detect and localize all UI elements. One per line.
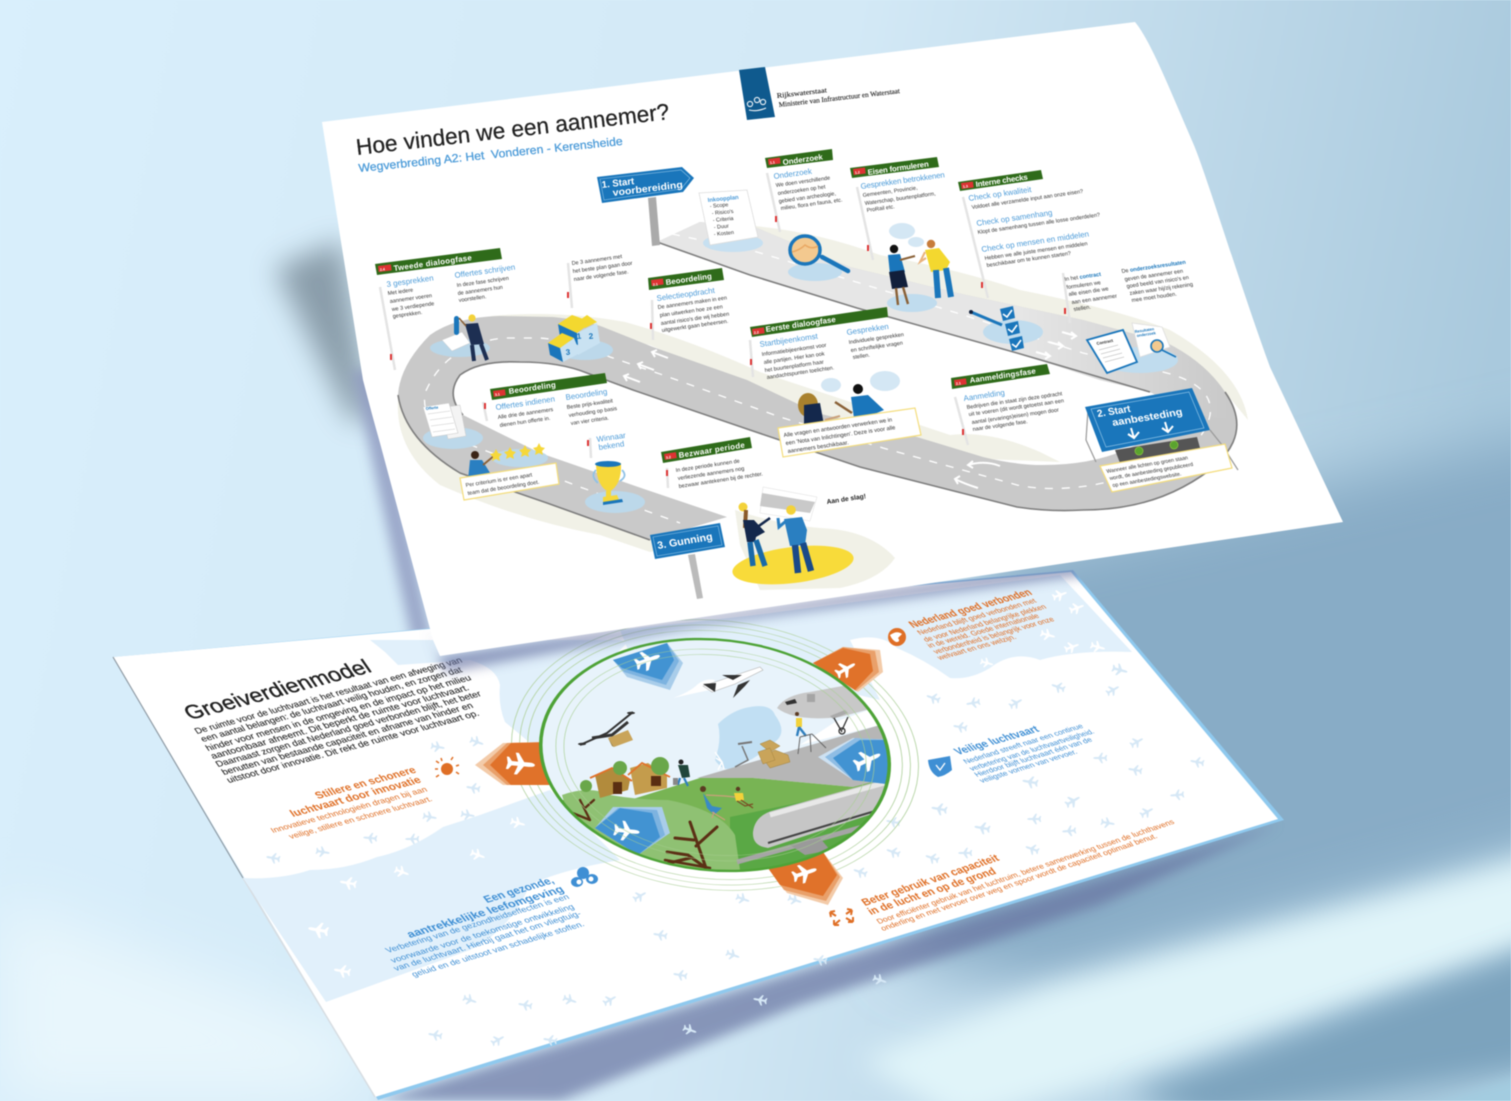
text: Winnaar bekend: [596, 431, 627, 452]
callout: aanbesteding gepubliceerd: [1100, 444, 1232, 492]
text block: Veilige luchtvaart: Hierdoor blijft luchtvaart één van de: [972, 735, 1094, 779]
pattern: white aeroplanes on the land: [307, 587, 1106, 979]
inkoopplan document: Inkoopplan: [707, 195, 740, 204]
panel: Bezwaar periode: Bezwaar periode: [678, 440, 746, 460]
text block: Nederland goed verbonden: Nederland blijft goed verbonden met: [915, 596, 1039, 637]
text block: Nederland goed verbonden: Nederland goed verbonden: [906, 587, 1035, 630]
cloud and plane: [677, 680, 715, 697]
panel: Tweede dialoogfase: [375, 248, 516, 320]
panel: Interne checks: Interne checks: [975, 172, 1029, 189]
text block: introduction: aantoonbaar afneemt. Dit beperkt de ruimte voor luchtvaart.: [208, 683, 471, 761]
panel: Aanmeldingsfase: uit te voeren (dit wordt getoetst aan een: [968, 398, 1064, 418]
panel: Eisen formuleren: Waterschap, buurtenplatform,: [864, 191, 936, 207]
panel: Aanmeldingsfase: Aanmelding: [963, 388, 1005, 403]
text block: Stillere en schonere luchtvaart: [269, 765, 434, 841]
people in conversation: [798, 371, 900, 427]
panel: Beoordeling selectie: 2.1: [653, 282, 658, 287]
scene inside circle: [542, 652, 885, 870]
offerte documents: Offerte: [425, 406, 439, 411]
panel: Onderzoek: We doen verschillende: [775, 175, 831, 189]
heading: Groeiverdienmodel: Groeiverdienmodel: [179, 655, 376, 724]
text block: Een gezonde, aantrekkelijke leefomgeving: aantrekkelijke leefomgeving: [404, 884, 567, 940]
panel: Eisen formuleren: 1.2: [855, 170, 860, 175]
text block: contract and research: goed beeld van risico's en: [1126, 275, 1190, 290]
icon: tree and bicycle: [571, 867, 598, 887]
text block: volgende fase: naar de volgende fase.: [573, 269, 630, 283]
text block: contract and research: formuleren we: [1066, 280, 1102, 291]
panel: Onderzoek: Onderzoek: [782, 152, 824, 167]
worker and ladder: [795, 712, 826, 754]
panel: Onderzoek: onderzoeken op het: [777, 184, 826, 197]
panel: Beoordeling offertes: 3.1: [495, 392, 500, 397]
text block: introduction: De ruimte voor de luchtvaart is het resultaat van een afweging van: [192, 655, 464, 736]
orange pentagon: top right: [813, 647, 883, 692]
inkoopplan document: - Duur: [713, 224, 729, 231]
panel: Beoordeling offertes: verhouding op basis: [568, 406, 618, 419]
sign: 1. Start voorbereiding: 1. Start: [601, 176, 636, 191]
text block: Stillere en schonere luchtvaart: luchtvaart door innovatie: [288, 775, 424, 820]
callout: aanbesteding gepubliceerd: wordt, de aanbesteding gepubliceerd: [1109, 462, 1194, 482]
train: [736, 782, 886, 864]
blue pentagon: lower left: [595, 807, 670, 855]
text block: Nederland goed verbonden: welvaart en ons welzijn.: [934, 633, 1018, 662]
magnifier icon: [788, 236, 848, 281]
panel: Beoordeling offertes: Beste prijs-kwaliteit: [566, 398, 614, 411]
callout: beoordeling per criterium: Per criterium is er een apart: [465, 472, 533, 489]
logo: Rijkswaterstaat: [739, 67, 900, 120]
panel: Aanmeldingsfase: [951, 364, 1064, 433]
team with plan: Aan de slag: [730, 487, 866, 590]
text block: Een gezonde, aantrekkelijke leefomgeving: Verbetering van de gezondheidseffecten is een: [384, 893, 571, 955]
title: Hoe vinden we een aannemer?: [354, 98, 671, 160]
panel: Eerste dialoogfase: aandachtspunten toelichten.: [766, 365, 835, 381]
inkoopplan document: - Kosten: [713, 230, 734, 238]
man with suitcase: [673, 760, 690, 786]
panel: Onderzoek: [765, 149, 843, 212]
panel: Eerste dialoogfase: en schriftelijke vragen: [850, 340, 903, 354]
shadow of the top sheet on the background: [275, 240, 432, 640]
houses: [580, 757, 670, 798]
shadow of the lower sheet: [375, 824, 1280, 1101]
callout: Nota van Inlichtingen: Alle vragen en antwoorden verwerken we in: [783, 417, 893, 439]
text block: Beter gebruik van capaciteit: onderling en met vervoer over weg en spoor wordt de capaciteit optimaal benut.: [879, 832, 1159, 933]
text block: contract and research: De onderzoeksresultaten: [1121, 260, 1187, 275]
panel: Interne checks: Voldoet alle verzamelde input aan onze eisen?: [971, 189, 1084, 211]
panel: Onderzoek: milieu, flora en fauna, etc.: [780, 197, 843, 212]
panel: Beoordeling offertes: Alle drie de aannemers: [497, 407, 554, 421]
map shapes: pale blue land: [243, 575, 1132, 1002]
panel: Aanmeldingsfase: 2.1: [956, 381, 961, 386]
sign: 1. Start voorbereiding: voorbereiding: [612, 180, 683, 199]
panel: Eerste dialoogfase: Gesprekken: [846, 322, 889, 337]
text block: contract and research: mee moet houden.: [1131, 291, 1178, 304]
panel: Beoordeling offertes: dienen hun offerte in.: [499, 416, 551, 429]
text block: Beter gebruik van capaciteit: in de lucht en op de grond: [865, 866, 999, 917]
panel: Eerste dialoogfase: [750, 307, 904, 381]
trophy: [585, 461, 645, 513]
inkoopplan document: - Scope: [709, 202, 729, 210]
callout: Nota van Inlichtingen: aannemers beschikbaar.: [787, 440, 850, 455]
panel: Eerste dialoogfase: het buurtenplatform haar: [764, 359, 824, 374]
panel: Interne checks: Check op mensen en middelen: [981, 230, 1090, 254]
text block: introduction: een aantal belangen: de luchtvaart veilig houden, en zorgen dat: [198, 665, 465, 744]
panel: Aanmeldingsfase: aantal (ervarings)eisen) mogen door: [971, 407, 1060, 426]
panel: Interne checks: Check op samenhang: [976, 208, 1053, 228]
panel: Onderzoek: gebied van archeologie,: [778, 191, 837, 205]
panel: Eisen formuleren: Eisen formuleren: [867, 159, 929, 177]
text block: Nederland goed verbonden: verbondenheid is belangrijk voor onze: [931, 615, 1056, 656]
text block: introduction: Daarnaast zorgen dat Nederland goed verbonden blijft, het beter: [213, 689, 483, 769]
panel: Bezwaar periode: In deze periode kunnen de: [675, 458, 740, 474]
text block: Beter gebruik van capaciteit: Beter gebruik van capaciteit: [859, 853, 1002, 908]
text block: contract and research: zaken waar hij/zij rekening: [1129, 282, 1194, 297]
panel: Beoordeling selectie: Selectieopdracht: [656, 286, 716, 303]
panel: Beoordeling selectie: De aannemers maken in een: [657, 295, 727, 311]
panel: Aanmeldingsfase: Bedrijven die in staat zijn deze opdracht: [966, 391, 1063, 411]
panel: Eerste dialoogfase: Individuele gesprekken: [848, 332, 904, 346]
text block: Nederland goed verbonden: [906, 587, 1056, 662]
text block: Veilige luchtvaart: [952, 722, 1096, 785]
callout: Nota van Inlichtingen: [778, 408, 921, 457]
panel: Tweede dialoogfase: Met iedere: [387, 287, 414, 297]
panel: Interne checks: Check op kwaliteit: [968, 185, 1033, 203]
text block: contract and research: alle eisen die we: [1068, 286, 1109, 298]
text block: Een gezonde, aantrekkelijke leefomgeving: van de luchtvaart. Hierbij gaat het om vliegtuig-: [392, 909, 584, 973]
sign: 3. Gunning: 3. Gunning: [656, 532, 714, 552]
aircraft: [777, 686, 867, 736]
text block: Stillere en schonere luchtvaart: Innovatieve technologieën dragen bij aan: [269, 785, 429, 835]
logo: Rijkswaterstaat: Ministerie van Infrastructuur en Waterstaat: [778, 87, 900, 109]
road: [398, 222, 1237, 540]
text block: Veilige luchtvaart: Nederland streeft naar een continue: [961, 722, 1085, 766]
control tower and wind turbine: [715, 742, 752, 770]
contract and research documents: Contract: [1096, 338, 1114, 346]
shadow of the top sheet on the lower sheet: [432, 570, 1082, 679]
map of the Netherlands: [715, 706, 781, 769]
panel: Beoordeling offertes: Beoordeling: [565, 387, 608, 402]
inkoopplan document: - Risico's: [711, 209, 734, 217]
text block: Veilige luchtvaart: veiligste vormen van vervoer.: [977, 748, 1079, 785]
text block: contract and research: In het contract: [1064, 272, 1102, 283]
panel: Aanmeldingsfase: Aanmeldingsfase: [969, 366, 1037, 385]
panel: Beoordeling selectie: Beoordeling: [665, 272, 712, 287]
panel: Onderzoek: Onderzoek: [773, 167, 812, 181]
panel: Tweede dialoogfase: gesprekken.: [392, 310, 423, 320]
panel: Beoordeling selectie: uitgewerkt gaan beheersen.: [661, 319, 729, 334]
subtitle: Wegverbreding A2: Het Vonderen - Kerensheide: [358, 136, 623, 175]
panel: Interne checks: beschikbaar om te kunnen starten?: [986, 251, 1072, 269]
cargo boxes: [758, 740, 790, 768]
text block: Nederland goed verbonden: de voor Nederland belangrijke plekken: [921, 603, 1048, 644]
panel: Interne checks: 1.3: [963, 184, 968, 189]
text block: Stillere en schonere luchtvaart: veilige, stillere en schonere luchtvaart.: [287, 795, 434, 841]
panel: Eerste dialoogfase: alle partijen. Hier kan ook: [763, 351, 825, 366]
panel: Beoordeling selectie: plan uitwerken hoe ze een: [659, 304, 723, 319]
sign: 2. Start aanbesteding: aanbesteding: [1111, 407, 1184, 429]
podium: 3: [565, 348, 571, 357]
panel: Beoordeling offertes: van vier criteria.: [570, 415, 610, 427]
callout: aanbesteding gepubliceerd: Wanneer alle lichten op groen staan: [1106, 455, 1189, 475]
orange pentagon: left: [475, 742, 552, 785]
panel: Eisen formuleren: [850, 157, 945, 214]
checklist icon: [969, 306, 1043, 351]
trees: [570, 800, 717, 868]
panel: Eerste dialoogfase: Startbijeenkomst: [759, 332, 819, 349]
text block: introduction: uitstoot door innovatie. Dit rekt de ruimte voor luchtvaart op.: [224, 708, 481, 785]
contract and research documents: [1087, 323, 1178, 373]
text block: Een gezonde, aantrekkelijke leefomgeving: voorwaarde voor de toekomstige ontwikkeling: [389, 903, 576, 965]
rings: [489, 615, 941, 895]
icon: shield: [928, 756, 952, 777]
panel: Tweede dialoogfase: In deze fase schrijven: [456, 276, 509, 289]
panel: Beoordeling offertes: Beoordeling: [508, 380, 556, 396]
panel: Eisen formuleren: Gesprekken betrokkenen: [860, 170, 945, 191]
km posts: [380, 173, 1070, 488]
offerte documents: [423, 403, 483, 449]
panel: Bezwaar periode: bezwaar aantekenen bij de rechter.: [678, 471, 764, 490]
panel: Eisen formuleren: Gemeenten, Provincie,: [862, 185, 919, 199]
lower sheet: Groeiverdienmodel: [113, 570, 1284, 1100]
woman with rating stars: [468, 443, 548, 480]
text block: Een gezonde, aantrekkelijke leefomgeving: geluid en de uitstoot van schadelijke stoffen.: [410, 920, 586, 979]
worker with marker on left road: [430, 314, 490, 361]
inner rings and green ring: [521, 635, 909, 875]
panel: Eerste dialoogfase: stellen.: [852, 353, 871, 361]
text block: introduction: hinder voor mensen in de omgeving en de impact op het milieu: [203, 673, 473, 753]
people talking: [887, 223, 951, 312]
inkoopplan document: - Criteria: [712, 216, 735, 224]
text block: Veilige luchtvaart: verbetering van de luchtvaartveiligheid.: [967, 727, 1096, 773]
podium: 2: [588, 332, 594, 341]
panel: Beoordeling selectie: aantal risico's die wij hebben: [660, 311, 730, 327]
panel: Onderzoek: 1.1: [770, 160, 775, 165]
panel: Tweede dialoogfase: aannemer voeren: [389, 293, 432, 305]
diagram: circle with scene: [475, 615, 941, 905]
panel: Bezwaar periode: 3.2: [666, 455, 671, 460]
callout: beoordeling per criterium: team dat de beoordeling doet.: [467, 480, 540, 497]
text block: Een gezonde, aantrekkelijke leefomgeving: [384, 875, 586, 979]
panel: Eerste dialoogfase: Informatiebijeenkomst voor: [761, 343, 827, 358]
text block: volgende fase: het beste plan gaan door: [572, 261, 633, 275]
team with plan: Aan de slag: Aan de slag!: [826, 493, 866, 506]
panel: Tweede dialoogfase: 3 gesprekken: [386, 274, 434, 289]
panel: Interne checks: [958, 170, 1101, 269]
podium: [548, 315, 613, 362]
orange pentagon: bottom: [768, 852, 843, 905]
text block: introduction: [192, 655, 483, 785]
text block: contract and research: aan een aannemer: [1071, 293, 1118, 306]
icon: light bulb: [435, 757, 459, 777]
panel: Bezwaar periode: [661, 437, 764, 490]
panel: Tweede dialoogfase: we 3 verdiepende: [390, 301, 435, 313]
logo: Rijkswaterstaat: Rijkswaterstaat: [776, 86, 827, 100]
panel: Tweede dialoogfase: voorstellen.: [458, 294, 487, 304]
panel: Tweede dialoogfase: Offertes schrijven: [454, 263, 516, 280]
text: Winnaar bekend: bekend: [598, 439, 625, 452]
road shoulders: [398, 224, 1248, 590]
contract and research documents: Resultaten: [1134, 327, 1155, 334]
grass: [562, 777, 873, 828]
icon: globe: [888, 628, 906, 646]
panel: Tweede dialoogfase: 2.4: [380, 267, 385, 272]
woman and child: [700, 786, 753, 820]
pattern: small aeroplanes: [265, 662, 1205, 1048]
icon: arrows: [830, 909, 853, 925]
blue pentagon: top: [613, 643, 683, 690]
text block: volgende fase: De 3 aannemers met: [571, 254, 623, 267]
text block: contract and research: [1064, 260, 1194, 313]
panel: Tweede dialoogfase: Tweede dialoogfase: [393, 253, 473, 273]
inkoopplan document: [699, 190, 763, 252]
panel: Bezwaar periode: verliezende aannemers nog: [677, 466, 745, 482]
apron: [698, 726, 884, 788]
text block: Een gezonde, aantrekkelijke leefomgeving: Een gezonde,: [481, 875, 557, 905]
callout: aanbesteding gepubliceerd: op een aanbestedingswebsite.: [1112, 471, 1182, 489]
panel: Tweede dialoogfase: de aannemers hun: [457, 285, 503, 297]
callout: beoordeling per criterium: [460, 463, 559, 500]
text block: contract and research: stellen.: [1073, 305, 1092, 313]
panel: Beoordeling offertes: Offertes indienen: [495, 394, 555, 412]
sign: 1. Start voorbereiding: [597, 167, 694, 246]
panel: Interne checks: Hebben we alle juiste mensen en middelen: [984, 241, 1088, 262]
text block: volgende fase: [571, 254, 633, 283]
text block: Stillere en schonere luchtvaart: Stillere en schonere: [313, 765, 419, 802]
panel: Beoordeling selectie: [648, 268, 730, 334]
panel: Eerste dialoogfase: 2.2: [754, 330, 759, 335]
panel: Aanmeldingsfase: naar de volgende fase.: [972, 419, 1029, 433]
blue pentagon: right: [818, 738, 895, 785]
text: Winnaar bekend: Winnaar: [596, 431, 627, 444]
sign: 2. Start aanbesteding: [1085, 388, 1238, 470]
panel: Interne checks: Klopt de samenhang tussen alle losse onderdelen?: [977, 212, 1101, 236]
drone with package: [578, 712, 635, 747]
panel: Beoordeling offertes: [490, 373, 618, 429]
text block: introduction: benutten van bestaande capaciteit en afname van hinder en: [219, 701, 475, 777]
contract and research documents: onderzoek: [1136, 331, 1157, 338]
sign: 2. Start aanbesteding: 2. Start: [1096, 404, 1133, 420]
top sheet: Hoe vinden we een aannemer?: [322, 22, 1343, 656]
text block: Nederland goed verbonden: in de wereld. Goede internationale: [925, 612, 1041, 650]
podium: 1: [576, 332, 582, 341]
panel: Eisen formuleren: ProRail etc.: [866, 204, 896, 214]
text block: contract and research: geven de aannemer een: [1124, 269, 1184, 283]
text block: Veilige luchtvaart: Veilige luchtvaart: [952, 724, 1043, 757]
sign: 3. Gunning: [650, 523, 725, 599]
text block: Beter gebruik van capaciteit: Door efficiënter gebruik van het luchtruim, betere samenwerking tussen de luchthavens: [875, 818, 1176, 926]
panel: Eerste dialoogfase: Eerste dialoogfase: [765, 315, 837, 334]
callout: Nota van Inlichtingen: een 'Nota van Inlichtingen'. Deze is voor alle: [785, 425, 896, 447]
